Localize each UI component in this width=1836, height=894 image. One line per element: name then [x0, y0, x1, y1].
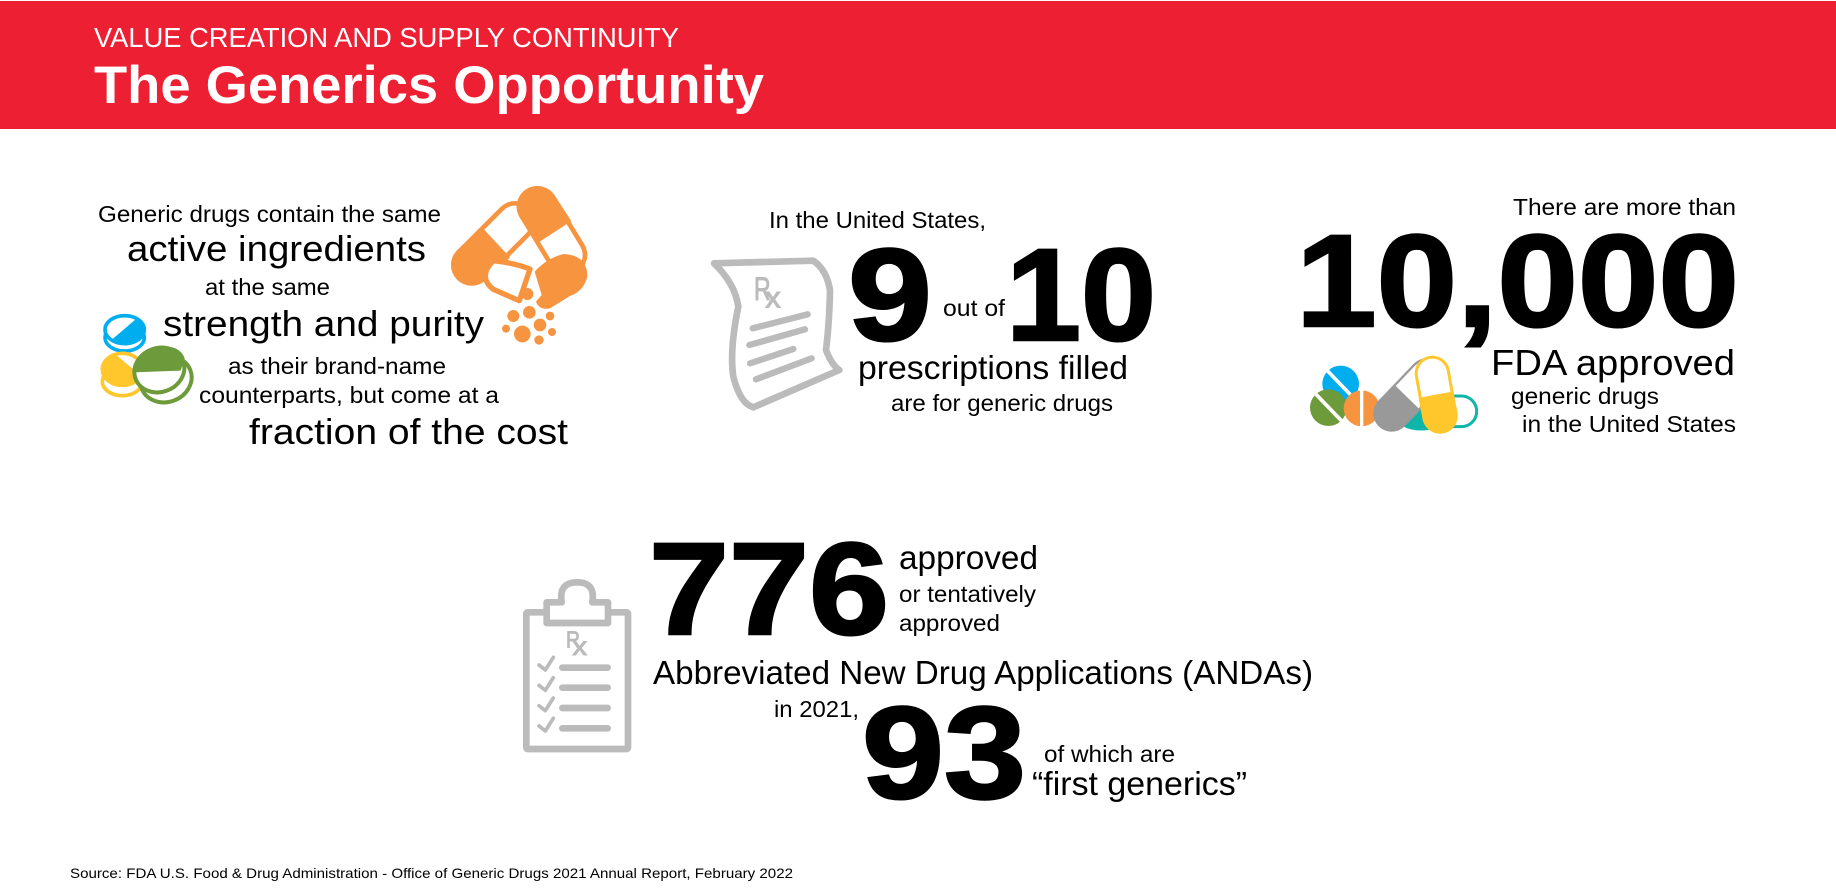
panel: 776 and 93 stats	[649, 515, 1313, 826]
panel: 776 and 93 stats: in 2021,	[774, 696, 859, 722]
icon: prescription paper: R	[754, 270, 771, 307]
panel: 776 and 93 stats: or tentatively	[899, 581, 1037, 607]
number: 9: 9	[848, 221, 932, 368]
icon: prescription clipboard	[526, 582, 628, 749]
panel: 9 out of 10 stat: out of	[943, 295, 1006, 321]
panel: 776 and 93 stats: approved	[899, 610, 1000, 636]
panel: active ingredients text: strength and purity	[163, 303, 484, 344]
panel: active ingredients text: Generic drugs contain the same	[98, 201, 441, 227]
panel: active ingredients text: as their brand-name	[228, 353, 446, 379]
panel: active ingredients text	[98, 201, 568, 452]
panel: 776 and 93 stats: “first generics”	[1032, 765, 1247, 802]
number: 10,000: 10,000	[1296, 207, 1739, 354]
panel: 776 and 93 stats: of which are	[1044, 741, 1175, 767]
panel: active ingredients text: active ingredients	[127, 228, 426, 269]
panel: 776 and 93 stats: Abbreviated New Drug Applications (ANDAs)	[653, 654, 1313, 691]
panel: 10,000 stat: in the United States	[1522, 411, 1736, 437]
panel: 10,000 stat: FDA approved	[1491, 342, 1735, 383]
panel: 9 out of 10 stat: are for generic drugs	[891, 390, 1113, 416]
icon: round tablets	[102, 316, 198, 410]
header banner	[0, 1, 1836, 129]
panel: 9 out of 10 stat: prescriptions filled	[858, 349, 1128, 386]
icon: prescription clipboard: x	[572, 631, 587, 661]
title: The Generics Opportunity	[94, 56, 765, 115]
header eyebrow: VALUE CREATION AND SUPPLY CONTINUITY	[94, 22, 679, 53]
panel: 9 out of 10 stat	[769, 207, 1156, 416]
panel: 10,000 stat	[1296, 194, 1739, 437]
panel: active ingredients text: fraction of the cost	[249, 411, 568, 452]
panel: 10,000 stat: generic drugs	[1511, 383, 1659, 409]
number: 93: 93	[862, 679, 1026, 826]
icon: orange capsules with powder	[451, 186, 587, 345]
icon: prescription paper	[714, 261, 839, 407]
panel: active ingredients text: at the same	[205, 274, 330, 300]
icon: prescription paper: x	[765, 281, 781, 314]
panel: active ingredients text: counterparts, but come at a	[199, 382, 499, 408]
icon: prescription clipboard: R	[566, 627, 580, 653]
panel: 776 and 93 stats: approved	[899, 539, 1038, 576]
panel: 9 out of 10 stat: In the United States,	[769, 207, 986, 233]
number: 10: 10	[1006, 221, 1156, 368]
source note: Source: FDA U.S. Food & Drug Administration - Office of Generic Drugs 2021 Annual Report, February 2022	[70, 865, 793, 881]
panel: 10,000 stat: There are more than	[1513, 194, 1736, 220]
number: 776: 776	[649, 515, 889, 662]
icon: assorted pills and capsules	[1310, 366, 1477, 434]
